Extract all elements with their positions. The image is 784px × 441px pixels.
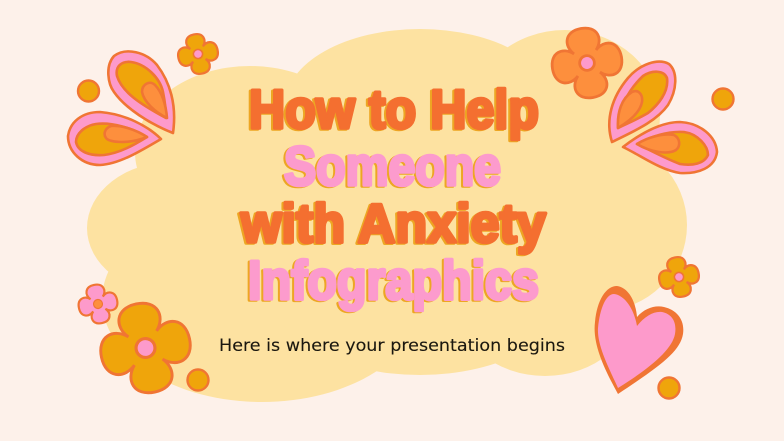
- leaf: top right upper: [609, 62, 675, 142]
- cloud blob: [87, 29, 687, 402]
- icon: small flower top left: [174, 30, 222, 78]
- leaf: top right lower: [623, 122, 717, 173]
- icon: orange flower top right: [546, 22, 628, 104]
- icon: big amber flower: [92, 295, 199, 401]
- dot: bottom right: [658, 378, 680, 398]
- title line 4: Infographics: [248, 249, 539, 311]
- icon: pink flower bottom left: [75, 281, 121, 327]
- dot: top left: [78, 80, 99, 102]
- title line 2: Someone: [284, 135, 501, 197]
- icon: heart: [595, 286, 683, 394]
- subtitle: Here is where your presentation begins: [219, 336, 565, 356]
- icon: small flower bottom right: [655, 253, 703, 301]
- title: [240, 78, 546, 311]
- title line 3: with Anxiety: [240, 192, 546, 254]
- leaf: top left lower: [68, 112, 161, 165]
- title line 1: How to Help: [249, 78, 539, 140]
- dot: bottom left: [188, 370, 208, 390]
- leaf: top left upper: [108, 51, 174, 133]
- dot: top right: [712, 88, 734, 110]
